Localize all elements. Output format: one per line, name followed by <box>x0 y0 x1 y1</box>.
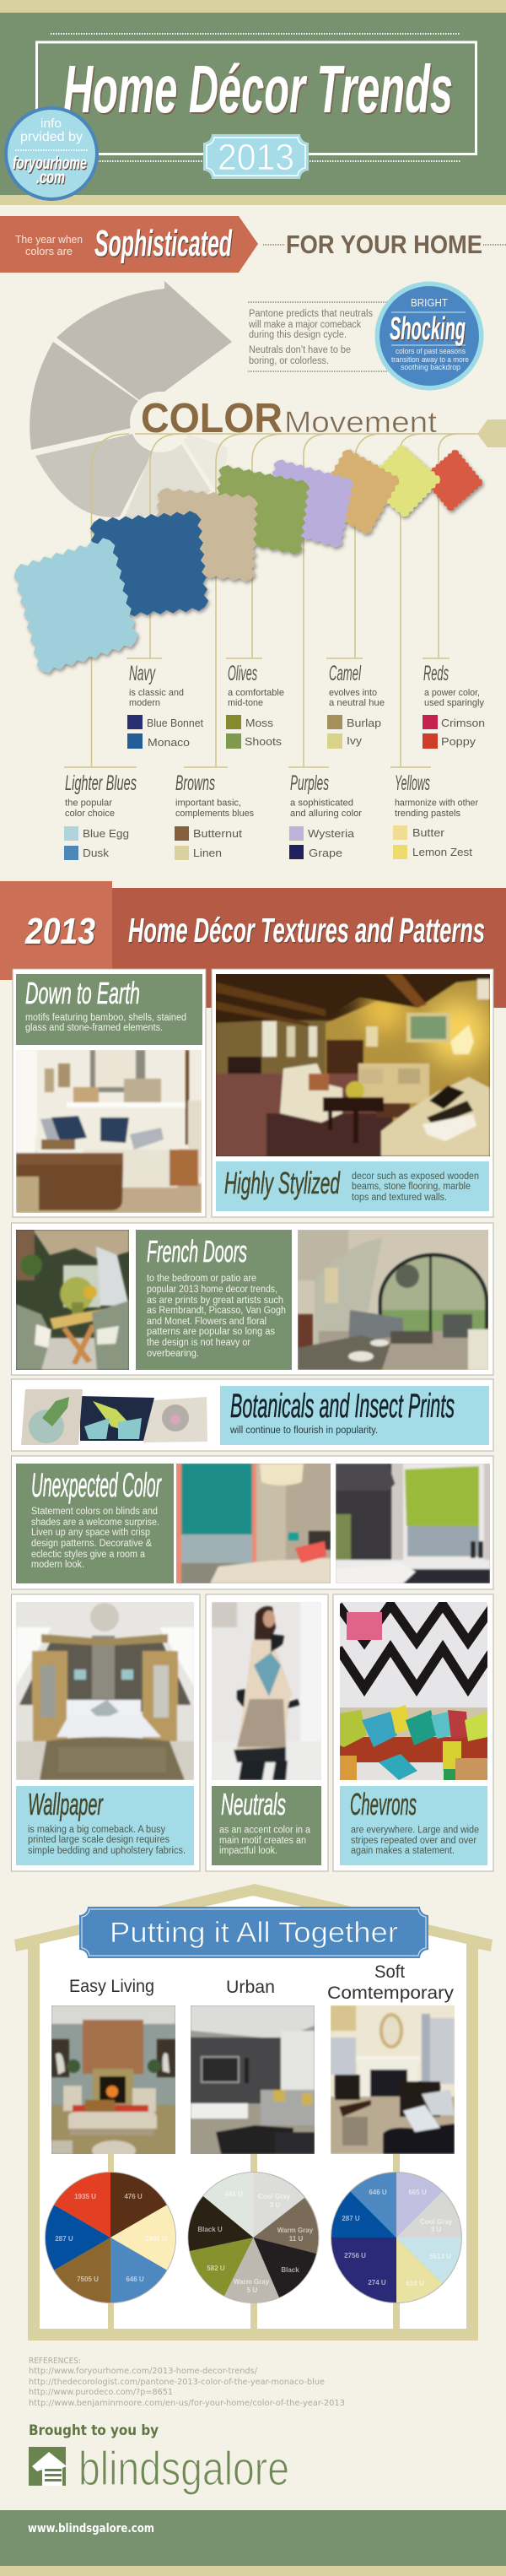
photo: urban room <box>191 2005 315 2154</box>
panel: wallpaper: simple bedding and upholstery fabrics. <box>28 1846 186 1856</box>
label: olives: a comfortable <box>228 688 284 698</box>
for your home heading: FOR YOUR HOME <box>286 230 482 259</box>
panel: highly stylized: tops and textured walls. <box>352 1193 447 1203</box>
label: purples: Wysteria <box>308 827 355 840</box>
panel: wallpaper: Wallpaper <box>28 1787 104 1821</box>
sophisticated banner: The year when <box>15 234 83 246</box>
label: reds <box>423 662 485 749</box>
panel: neutrals: Neutrals <box>221 1787 286 1821</box>
color movement heading <box>141 396 437 441</box>
label: lighter blues <box>64 771 137 860</box>
label: camel <box>327 662 385 749</box>
label: browns: complements blues <box>175 809 254 819</box>
neutrals note: will make a major comeback <box>248 320 361 330</box>
label: camel: Burlap <box>347 717 381 729</box>
pie chart: urban: 441 U <box>224 2190 243 2198</box>
color movement heading: COLOR <box>141 396 283 441</box>
textures section banner <box>0 881 506 1008</box>
panel: french doors: as Rembrandt, Picasso, Van Gogh <box>147 1306 286 1316</box>
label: browns <box>175 771 254 860</box>
label: browns: Browns <box>175 771 215 795</box>
label: purples: Grape <box>309 847 342 859</box>
bright shocking circle: colors of past seasons <box>396 347 466 355</box>
label: olives: mid-tone <box>228 698 263 708</box>
bright shocking circle: soothing backdrop <box>401 363 460 371</box>
panel: highly stylized: Highly Stylized <box>224 1166 341 1200</box>
pie chart: urban: 582 U <box>207 2265 225 2272</box>
panel: unexpected color: Unexpected Color <box>31 1467 162 1504</box>
panel: chevrons <box>333 1594 494 1871</box>
pie chart: easy living: 7505 U <box>77 2276 99 2283</box>
panel: down to earth: motifs featuring bamboo, shells, stained <box>25 1013 186 1023</box>
photo: woman in patterned dress <box>212 1602 321 1780</box>
panel: chevrons: stripes repeated over and over <box>351 1836 476 1846</box>
photo: green blind kitchen <box>336 1464 490 1583</box>
photo: soft contemporary room <box>331 2005 455 2154</box>
bright shocking circle <box>374 282 484 390</box>
label: purples: Purples <box>290 771 329 795</box>
label: olives: Olives <box>228 662 257 685</box>
photo: arched french doors <box>298 1230 488 1370</box>
label: navy: modern <box>129 698 160 708</box>
pie chart: urban: Warm Gray <box>234 2278 270 2286</box>
pie chart: soft contemporary: 5513 U <box>429 2253 451 2260</box>
pie chart: soft contemporary: 274 U <box>368 2279 386 2286</box>
references: REFERENCES: <box>29 2357 81 2366</box>
label: purples: and alluring color <box>290 809 362 819</box>
pie chart: urban <box>187 2172 319 2303</box>
bright shocking circle: transition away to a more <box>391 355 469 364</box>
label: navy: Navy <box>129 662 156 685</box>
pie chart: easy living: 646 U <box>126 2276 144 2283</box>
references: http://www.benjaminmoore.com/en-us/for-your-home/color-of-the-year-2013 <box>29 2399 345 2408</box>
label: lighter blues: Dusk <box>83 847 110 859</box>
panel: unexpected color <box>12 1456 493 1589</box>
pie chart: easy living: 1402 U <box>145 2235 167 2243</box>
panel: french doors: to the bedroom or patio are <box>147 1274 256 1284</box>
pie chart: urban: Cool Gray <box>258 2193 291 2200</box>
pie chart: soft contemporary: 665 U <box>408 2189 427 2196</box>
neutrals note: boring, or colorless. <box>249 356 329 366</box>
label: navy: Blue Bonnet <box>147 717 203 729</box>
label: purples: a sophisticated <box>290 798 353 809</box>
column heading: soft contemporary <box>327 1962 455 2003</box>
connector lines <box>64 419 506 767</box>
label: lighter blues: Blue Egg <box>83 827 129 840</box>
label: reds: Reds <box>423 662 449 685</box>
house frame <box>14 1884 493 2341</box>
label: browns: important basic, <box>175 798 241 809</box>
panel: french doors: the design is not heavy or <box>147 1338 250 1348</box>
panel: unexpected color: Statement colors on blinds and <box>31 1507 158 1517</box>
pie chart: urban: 5 U <box>247 2286 257 2294</box>
photo: stone wall living room <box>216 974 490 1156</box>
panel: down to earth <box>13 969 206 1217</box>
pie chart: soft contemporary <box>331 2172 462 2303</box>
panel: french doors: and Monet. Flowers and floral <box>147 1317 266 1327</box>
footer band <box>0 2510 506 2576</box>
fabric swatches <box>11 443 485 676</box>
photo: chevron wall and pillows <box>340 1602 487 1780</box>
pie chart: urban: Warm Gray <box>277 2227 314 2234</box>
panel: neutrals <box>206 1594 328 1871</box>
footer band: www.blindsgalore.com <box>28 2522 154 2535</box>
panel: chevrons: are everywhere. Large and wide <box>351 1825 479 1835</box>
label: lighter blues: Lighter Blues <box>65 771 137 795</box>
panel: down to earth: glass and stone-framed elements. <box>25 1023 163 1033</box>
panel: highly stylized: decor such as exposed wooden <box>352 1172 479 1182</box>
panel: wallpaper: printed large scale design requires <box>28 1835 170 1845</box>
pie chart: soft contemporary: Cool Gray <box>420 2218 453 2226</box>
panel: unexpected color: shades are a welcome surprise. <box>31 1518 159 1528</box>
blindsgalore logo <box>29 2442 289 2496</box>
label: yellows: harmonize with other <box>395 798 478 809</box>
sophisticated banner: colors are <box>25 246 73 257</box>
neutrals note <box>248 302 388 371</box>
label: yellows <box>393 771 478 859</box>
pie chart: urban: 3 U <box>270 2201 280 2209</box>
source badge: foryourhome <box>13 154 87 173</box>
panel: french doors: overbearing. <box>147 1349 199 1359</box>
pie chart: easy living: 1935 U <box>74 2193 96 2200</box>
panel: french doors <box>12 1223 493 1375</box>
pie chart: urban: Black U <box>197 2226 223 2233</box>
header band <box>0 0 506 205</box>
blindsgalore logo: blindsgalore <box>78 2442 289 2496</box>
label: olives: Moss <box>245 717 274 729</box>
pie chart: easy living: 287 U <box>55 2235 73 2243</box>
label: purples <box>289 771 362 859</box>
source badge: info <box>40 116 62 131</box>
label: lighter blues: color choice <box>65 809 115 819</box>
year badge: 2013 <box>218 137 294 178</box>
label: browns: Butternut <box>193 827 242 840</box>
label: yellows: Lemon Zest <box>412 846 472 858</box>
source badge: prvided by <box>20 130 83 144</box>
references <box>29 2357 345 2408</box>
panel: unexpected color: eclectic styles give a room a <box>31 1550 146 1560</box>
photo: patio dining <box>16 1230 129 1370</box>
panel: wallpaper: is making a big comeback. A busy <box>28 1825 165 1835</box>
panel: french doors: as are prints by great artists such <box>147 1296 283 1306</box>
label: lighter blues: the popular <box>65 798 112 809</box>
label: camel: evolves into <box>329 688 377 698</box>
panel: french doors: patterns are popular so long as <box>147 1327 275 1337</box>
pie chart: soft contemporary: 618 U <box>406 2280 424 2287</box>
label: yellows: Yellows <box>395 771 430 795</box>
references: http://www.foryourhome.com/2013-home-decor-trends/ <box>29 2367 258 2376</box>
source badge <box>4 106 99 201</box>
panel: unexpected color: modern look. <box>31 1560 84 1570</box>
textures section banner: 2013 <box>24 911 95 952</box>
label: reds: Crimson <box>441 717 485 729</box>
label: camel: Ivy <box>347 734 363 747</box>
sophisticated banner: Sophisticated <box>94 223 233 264</box>
label: navy: is classic and <box>129 688 184 698</box>
label: camel: Camel <box>329 662 362 685</box>
panel: unexpected color: Liven up any space with crisp <box>31 1528 150 1538</box>
panel: chevrons: Chevrons <box>350 1787 417 1821</box>
pie chart: easy living: 476 U <box>124 2193 143 2200</box>
image: printed pillows <box>21 1389 207 1445</box>
pie chart: soft contemporary: 287 U <box>342 2215 360 2222</box>
label: navy <box>127 662 203 749</box>
photo: easy living room <box>51 2005 175 2154</box>
neutrals note: Pantone predicts that neutrals <box>249 309 373 319</box>
panel: highly stylized <box>212 969 493 1217</box>
panel: neutrals: as an accent color in a <box>219 1825 311 1835</box>
column heading: urban: Urban <box>226 1978 275 1997</box>
panel: down to earth: Down to Earth <box>25 976 140 1010</box>
references: http://www.purodeco.com/?p=8651 <box>29 2388 173 2397</box>
pie chart: soft contemporary: 2756 U <box>344 2252 366 2259</box>
pie chart: easy living <box>45 2172 176 2303</box>
panel: french doors: French Doors <box>147 1234 247 1269</box>
label: olives <box>226 662 284 749</box>
label: camel: a neutral hue <box>329 698 385 708</box>
references: http://thedecorologist.com/pantone-2013-color-of-the-year-monaco-blue <box>29 2378 325 2387</box>
brought to you by: Brought to you by <box>29 2422 159 2439</box>
label: reds: used sparingly <box>424 698 484 708</box>
panel: chevrons: again makes a statement. <box>351 1846 455 1856</box>
putting it all together plaque <box>79 1907 428 1958</box>
label: reds: Poppy <box>441 735 476 748</box>
panel: highly stylized: beams, stone flooring, marble <box>352 1182 471 1192</box>
source badge: .com <box>36 168 65 187</box>
pie chart: urban: Black <box>281 2266 299 2274</box>
panel: botanicals and insect prints <box>12 1379 493 1451</box>
photo: teal shade bedroom <box>176 1464 331 1583</box>
bright shocking circle: BRIGHT <box>411 296 448 309</box>
pie chart: soft contemporary: 646 U <box>369 2189 387 2196</box>
panel: botanicals and insect prints: will continue to flourish in popularity. <box>229 1426 378 1436</box>
neutrals note: during this design cycle. <box>249 330 347 340</box>
panel: wallpaper <box>12 1594 200 1871</box>
putting it all together plaque: Putting it All Together <box>110 1917 398 1949</box>
pie chart: soft contemporary: 3 U <box>431 2226 441 2233</box>
sophisticated banner <box>0 216 258 273</box>
colour wheel arrow <box>30 281 232 519</box>
label: reds: a power color, <box>424 688 480 698</box>
column heading: soft contemporary: Soft <box>374 1962 405 1982</box>
photo: white sofa coastal room <box>16 1050 202 1213</box>
panel: neutrals: main motif creates an <box>219 1836 306 1846</box>
label: yellows: trending pastels <box>395 809 460 819</box>
pie chart: urban: 11 U <box>289 2235 303 2243</box>
column heading: soft contemporary: Comtemporary <box>327 1983 455 2003</box>
panel: french doors: popular 2013 home decor trends, <box>147 1285 277 1295</box>
panel: neutrals: impactful look. <box>219 1846 277 1856</box>
label: browns: Linen <box>193 847 222 859</box>
neutrals note: Neutrals don’t have to be <box>249 345 351 355</box>
photo: wallpapered attic bedroom <box>16 1602 194 1780</box>
panel: unexpected color: design patterns. Decorative & <box>31 1539 152 1549</box>
color movement heading: Movement <box>284 406 437 439</box>
column heading: easy living: Easy Living <box>69 1977 154 1996</box>
label: olives: Shoots <box>245 735 283 748</box>
label: yellows: Butter <box>412 826 445 839</box>
label: navy: Monaco <box>148 736 190 749</box>
